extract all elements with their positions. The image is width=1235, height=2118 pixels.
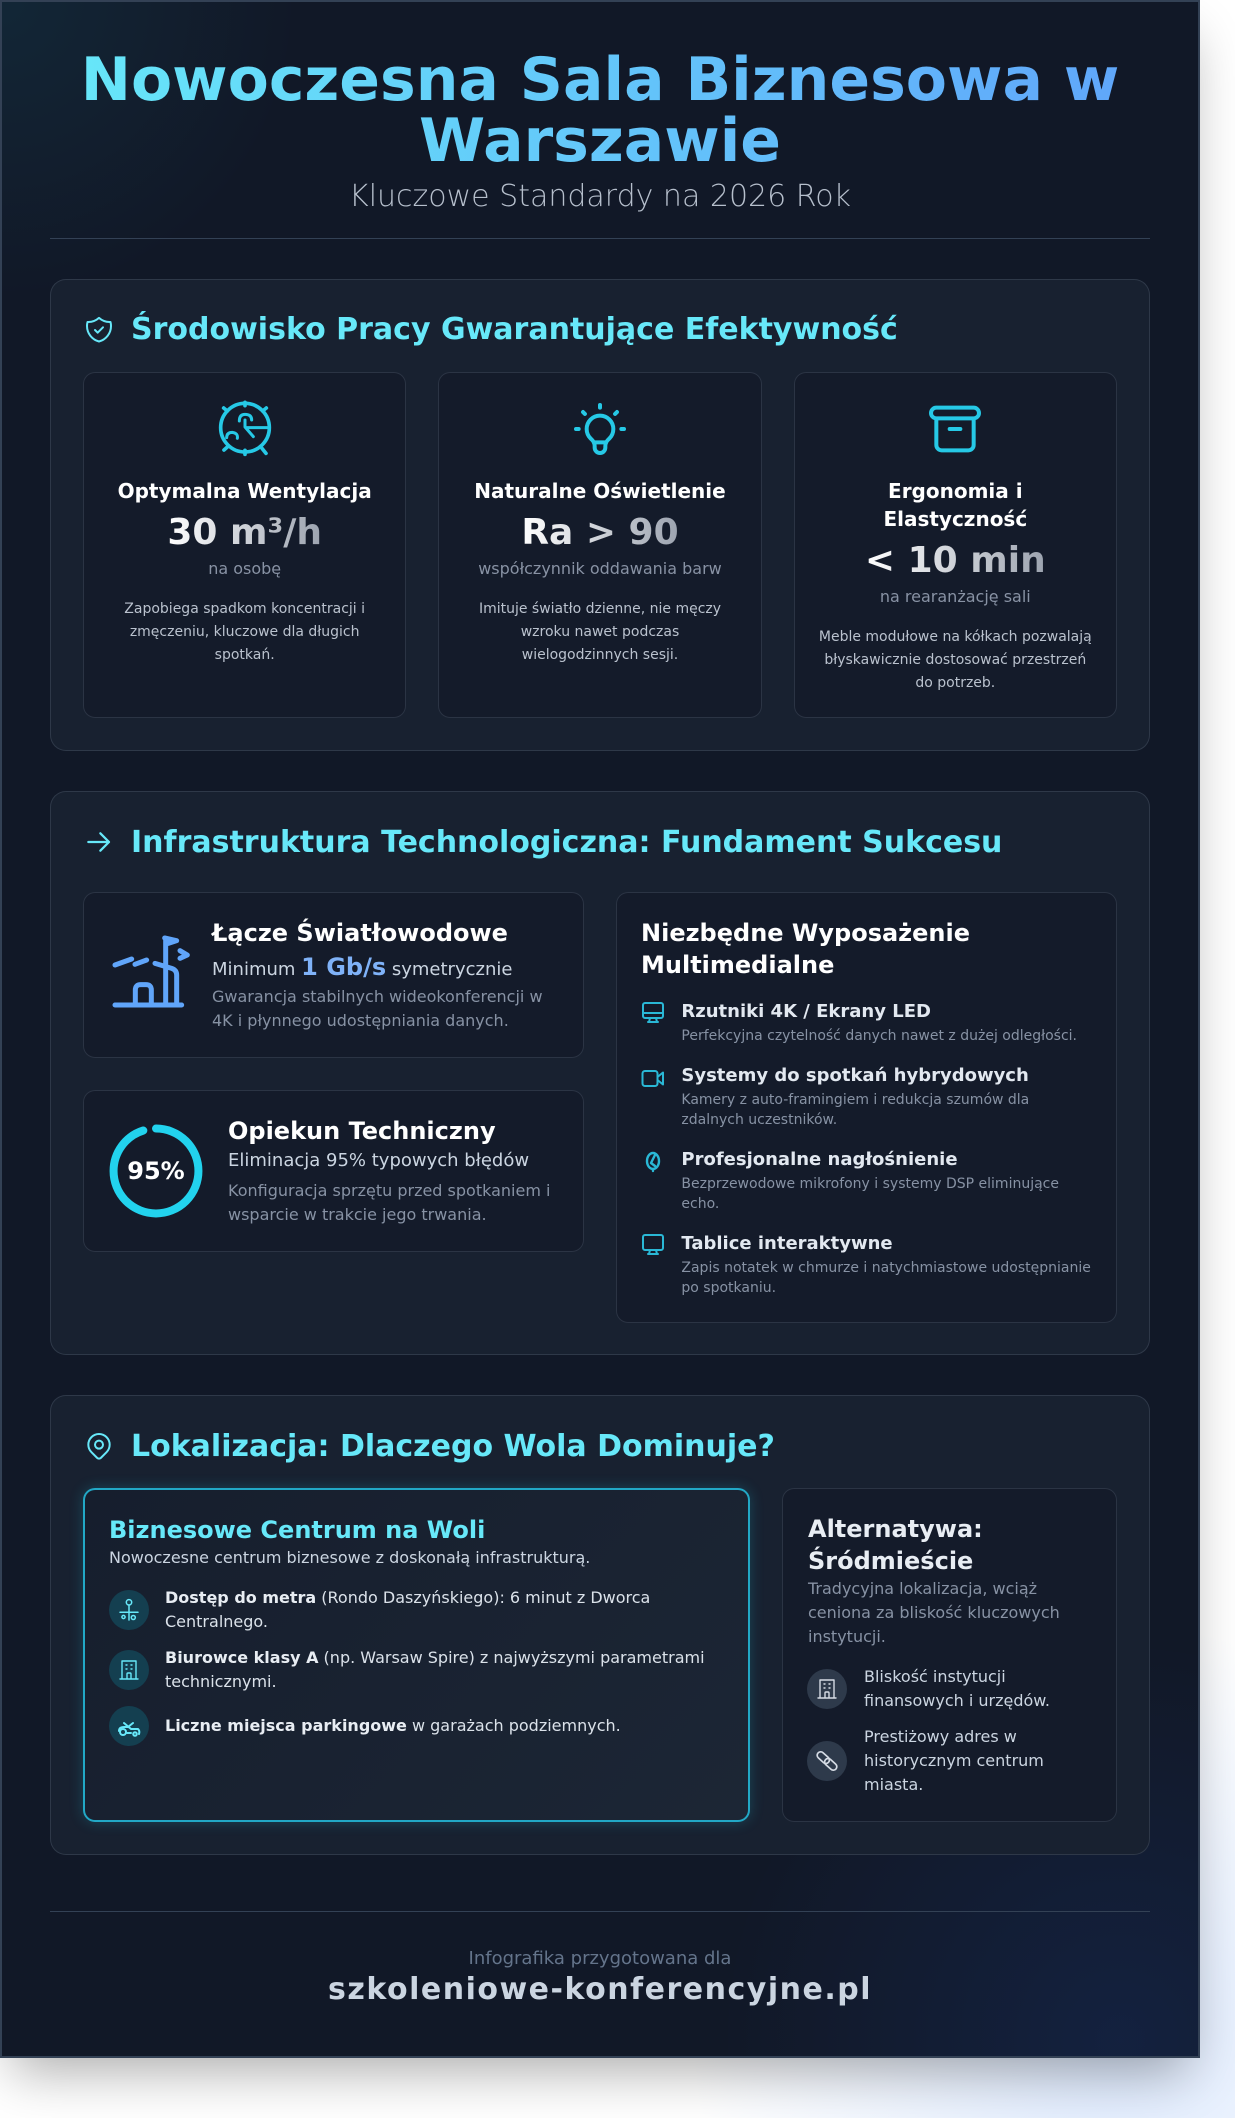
card subtitle: instytucji. (808, 1626, 886, 1646)
card: multimedia equipment (616, 892, 1117, 1323)
list item description (681, 1260, 1091, 1296)
ring value: 95% (127, 1157, 185, 1185)
list item: Prestiżowy adres w (864, 1726, 1017, 1746)
description: Konfiguracja sprzętu przed spotkaniem i (228, 1180, 550, 1200)
icon: light bulb (574, 403, 626, 455)
list item description: Zapis notatek w chmurze i natychmiastowe udostępnianie (681, 1260, 1091, 1276)
card subtitle: Tradycyjna lokalizacja, wciąż (808, 1578, 1037, 1598)
footer note: Infografika przygotowana dla (469, 1948, 731, 1969)
description: błyskawicznie dostosować przestrzeń (824, 652, 1086, 668)
description (479, 600, 721, 662)
list item: historycznym centrum (864, 1750, 1044, 1770)
list item description (681, 1176, 1059, 1212)
list item description: zdalnych uczestników. (681, 1112, 837, 1128)
icon: video camera (642, 1070, 664, 1087)
list item (165, 1588, 650, 1630)
card title: Opiekun Techniczny (228, 1117, 496, 1145)
list item: finansowych i urzędów. (864, 1691, 1050, 1710)
description: wielogodzinnych sesji. (522, 646, 678, 662)
list item: Biurowce klasy A (np. Warsaw Spire) z najwyższymi parametrami (165, 1648, 705, 1666)
list item title: Tablice interaktywne (681, 1233, 893, 1254)
section heading: location: Lokalizacja: Dlaczego Wola Dominuje? (131, 1429, 775, 1464)
card title: Alternatywa: (808, 1515, 983, 1543)
panel: work environment (50, 279, 1150, 751)
list item description: Kamery z auto-framingiem i redukcja szumów dla (681, 1092, 1029, 1108)
description: do potrzeb. (915, 674, 995, 690)
list item (864, 1667, 1050, 1710)
card: Wola business centre (83, 1488, 750, 1822)
icon: interactive whiteboard (642, 1234, 664, 1255)
icon: projector screen (642, 1002, 664, 1023)
card: Srodmiescie alternative (782, 1488, 1117, 1822)
card: fibre connection (83, 892, 584, 1058)
metric value: Ra > 90 (521, 512, 679, 552)
description: 4K i płynnego udostępniania danych. (212, 1010, 509, 1030)
list item title: Systemy do spotkań hybrydowych (681, 1065, 1029, 1086)
card: lighting (438, 372, 762, 718)
list item description: Perfekcyjna czytelność danych nawet z dużej odległości. (681, 1028, 1077, 1044)
card title (883, 479, 1027, 531)
description (212, 986, 543, 1030)
panel: technology infrastructure (50, 791, 1150, 1355)
list item title: Rzutniki 4K / Ekrany LED (681, 1000, 931, 1022)
footer (328, 1948, 872, 2007)
chart: 95 percent ring (110, 1124, 202, 1218)
title (50, 50, 1150, 172)
icon: map pin (87, 1433, 111, 1460)
description: Imituje światło dzienne, nie męczy (479, 600, 721, 616)
metric unit: na rearanżację sali (880, 586, 1031, 606)
metric unit: na osobę (208, 558, 281, 578)
icon: institution building (807, 1669, 847, 1709)
card: ergonomics (794, 372, 1117, 718)
metric value: 30 m³/h (167, 512, 322, 552)
card title: Ergonomia i (888, 479, 1023, 503)
icon: parking car (109, 1706, 149, 1746)
list item: Dostęp do metra (Rondo Daszyńskiego): 6 minut z Dworca (165, 1588, 650, 1606)
card subtitle: ceniona za bliskość kluczowych (808, 1602, 1060, 1622)
description: Gwarancja stabilnych wideokonferencji w (212, 986, 543, 1006)
subtitle: Kluczowe Standardy na 2026 Rok (349, 179, 851, 214)
icon: sound system (646, 1152, 660, 1172)
card: technical support (83, 1090, 584, 1252)
metric value: < 10 min (865, 540, 1046, 580)
title: Nowoczesna Sala Biznesowa w (81, 45, 1119, 115)
icon: ventilation clock (218, 400, 272, 456)
card title (808, 1515, 983, 1575)
list item: Liczne miejsca parkingowe w garażach podziemnych. (165, 1716, 621, 1734)
description: spotkań. (215, 646, 275, 662)
list item description: po spotkaniu. (681, 1280, 776, 1296)
card title: Naturalne Oświetlenie (474, 479, 726, 503)
metric unit: współczynnik oddawania barw (478, 558, 722, 578)
speed line: Minimum 1 Gb/s symetrycznie (212, 953, 512, 981)
list item description: Bezprzewodowe mikrofony i systemy DSP eliminujące (681, 1176, 1059, 1192)
icon: archive box (929, 406, 981, 452)
footer website: szkoleniowe-konferencyjne.pl (328, 1972, 872, 2007)
description (124, 600, 365, 662)
list item: Bliskość instytucji (864, 1667, 1006, 1686)
section heading: work environment: Środowisko Pracy Gwarantujące Efektywność (131, 312, 898, 347)
card: ventilation (83, 372, 406, 718)
card subtitle: Nowoczesne centrum biznesowe z doskonałą infrastrukturą. (109, 1548, 590, 1566)
card title: Optymalna Wentylacja (118, 479, 372, 503)
list item (864, 1726, 1044, 1794)
icon: arrow right (87, 832, 110, 852)
list item: miasta. (864, 1774, 923, 1794)
list item: Centralnego. (165, 1612, 268, 1630)
card title: Niezbędne Wyposażenie (641, 919, 970, 947)
description: zmęczeniu, kluczowe dla długich (130, 624, 360, 640)
description: Meble modułowe na kółkach pozwalają (819, 628, 1092, 644)
icon: fibre antenna (112, 936, 190, 1008)
icon: shield (86, 316, 112, 342)
panel: location (50, 1395, 1150, 1855)
list item: technicznymi. (165, 1672, 277, 1690)
card title: Elastyczność (883, 507, 1027, 531)
card subtitle (808, 1578, 1060, 1646)
icon: metro (109, 1590, 149, 1630)
list item (165, 1648, 705, 1690)
description: wsparcie w trakcie jego trwania. (228, 1204, 487, 1224)
list item title: Profesjonalne nagłośnienie (681, 1149, 958, 1170)
description (228, 1180, 550, 1224)
icon: office building (109, 1650, 149, 1690)
description (819, 628, 1092, 690)
card title: Śródmieście (808, 1547, 973, 1575)
card title: Multimedialne (641, 951, 834, 979)
section heading: infrastructure: Infrastruktura Technologiczna: Fundament Sukcesu (131, 825, 1002, 860)
list item description (681, 1092, 1029, 1128)
title: Warszawie (419, 106, 781, 176)
icon: chain link (807, 1741, 847, 1781)
description: wzroku nawet podczas (521, 624, 679, 640)
card title: Łącze Światłowodowe (212, 919, 508, 947)
card title: Biznesowe Centrum na Woli (109, 1516, 485, 1544)
support line: Eliminacja 95% typowych błędów (228, 1150, 529, 1171)
description: Zapobiega spadkom koncentracji i (124, 600, 365, 616)
list item description: echo. (681, 1196, 719, 1212)
card title (641, 919, 970, 979)
